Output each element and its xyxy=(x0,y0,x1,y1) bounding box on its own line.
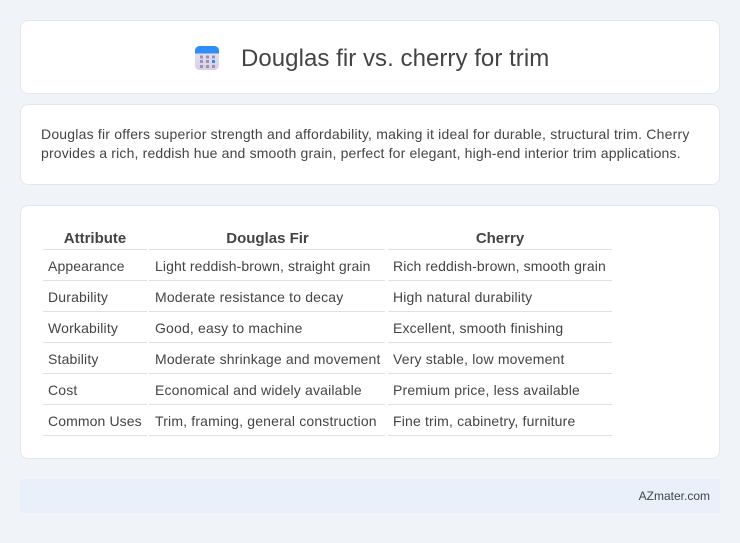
header: Attribute: Attribute xyxy=(64,230,126,247)
header: Cherry: Cherry xyxy=(476,230,524,247)
footer bar xyxy=(20,479,720,513)
row: Stability: Very stable, low movement xyxy=(393,351,565,367)
row: Workability xyxy=(48,320,563,336)
text block: summary: Douglas fir offers superior strength and affordability, making it ideal for durable, structural trim. Cherry xyxy=(41,126,690,142)
text block: summary xyxy=(41,126,690,161)
row: Durability: Moderate resistance to decay xyxy=(155,289,343,305)
icon: calendar xyxy=(195,46,219,70)
row: Appearance: Appearance xyxy=(48,258,125,274)
row: Appearance: Rich reddish-brown, smooth grain xyxy=(393,258,606,274)
row: Appearance xyxy=(48,258,606,274)
row: Cost: Premium price, less available xyxy=(393,382,580,398)
title: Douglas fir vs. cherry for trim xyxy=(241,45,549,72)
row: Common Uses xyxy=(48,413,575,429)
footer credit: AZmater.com xyxy=(639,489,710,503)
panel: title card xyxy=(20,20,720,94)
row: Stability: Moderate shrinkage and movement xyxy=(155,351,381,367)
panel: comparison table card xyxy=(20,205,720,459)
row: Cost xyxy=(48,382,580,398)
row: Durability: Durability xyxy=(48,289,108,305)
row: Durability: High natural durability xyxy=(393,289,532,305)
row: Workability: Excellent, smooth finishing xyxy=(393,320,563,336)
row: Common Uses: Fine trim, cabinetry, furniture xyxy=(393,413,575,429)
text block: summary: provides a rich, reddish hue and smooth grain, perfect for elegant, high-end interior trim applications. xyxy=(41,145,681,161)
row: Workability: Good, easy to machine xyxy=(155,320,303,336)
row: Workability: Workability xyxy=(48,320,118,336)
row: Cost: Cost xyxy=(48,382,77,398)
row: Durability xyxy=(48,289,532,305)
row: Appearance: Light reddish-brown, straight grain xyxy=(155,258,371,274)
row: Common Uses: Common Uses xyxy=(48,413,142,429)
row: Cost: Economical and widely available xyxy=(155,382,362,398)
row: Common Uses: Trim, framing, general construction xyxy=(155,413,377,429)
row: Stability xyxy=(48,351,565,367)
header: Douglas Fir: Douglas Fir xyxy=(226,230,309,247)
panel: summary card xyxy=(20,104,720,185)
comparison table xyxy=(43,230,612,436)
row: Stability: Stability xyxy=(48,351,99,367)
